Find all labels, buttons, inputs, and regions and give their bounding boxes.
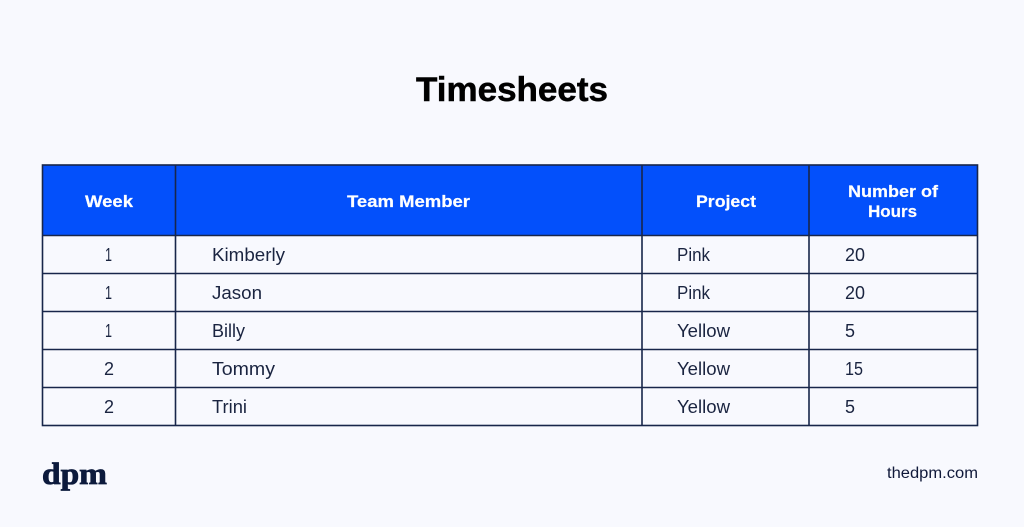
row 1: 20 (845, 245, 865, 265)
title: Timesheets (416, 71, 608, 109)
table header row (42, 165, 978, 235)
logo: dpm: dpm (42, 456, 107, 491)
row 1 (105, 245, 865, 265)
header: week: Week (85, 193, 134, 211)
row 5: Trini (212, 397, 247, 417)
row 2: 1 (105, 283, 112, 303)
row 4: 15 (845, 359, 863, 379)
row 4 (104, 359, 863, 379)
row 3: Yellow (677, 321, 731, 341)
row 3: Billy (212, 321, 245, 341)
row 2: Pink (677, 283, 711, 303)
row 3: 1 (105, 321, 112, 341)
row 5 (104, 397, 855, 417)
row 2: 20 (845, 283, 865, 303)
header: number of hours: Hours (868, 203, 917, 221)
row 3: 5 (845, 321, 855, 341)
header: number of hours (848, 183, 939, 221)
row 1: 1 (105, 245, 112, 265)
row 5: Yellow (677, 397, 731, 417)
row 4: Tommy (212, 359, 275, 379)
table: timesheets (42, 165, 978, 426)
row 5: 5 (845, 397, 855, 417)
row 2: Jason (212, 283, 262, 303)
row 5: 2 (104, 397, 114, 417)
header: team member: Team Member (347, 193, 471, 211)
row 4: Yellow (677, 359, 731, 379)
row 2 (105, 283, 865, 303)
row 4: 2 (104, 359, 114, 379)
row 3 (105, 321, 855, 341)
row 1: Pink (677, 245, 711, 265)
header: number of hours: Number of (848, 183, 939, 201)
row 1: Kimberly (212, 245, 285, 265)
header: project: Project (696, 193, 757, 211)
website url: thedpm.com (887, 465, 978, 482)
